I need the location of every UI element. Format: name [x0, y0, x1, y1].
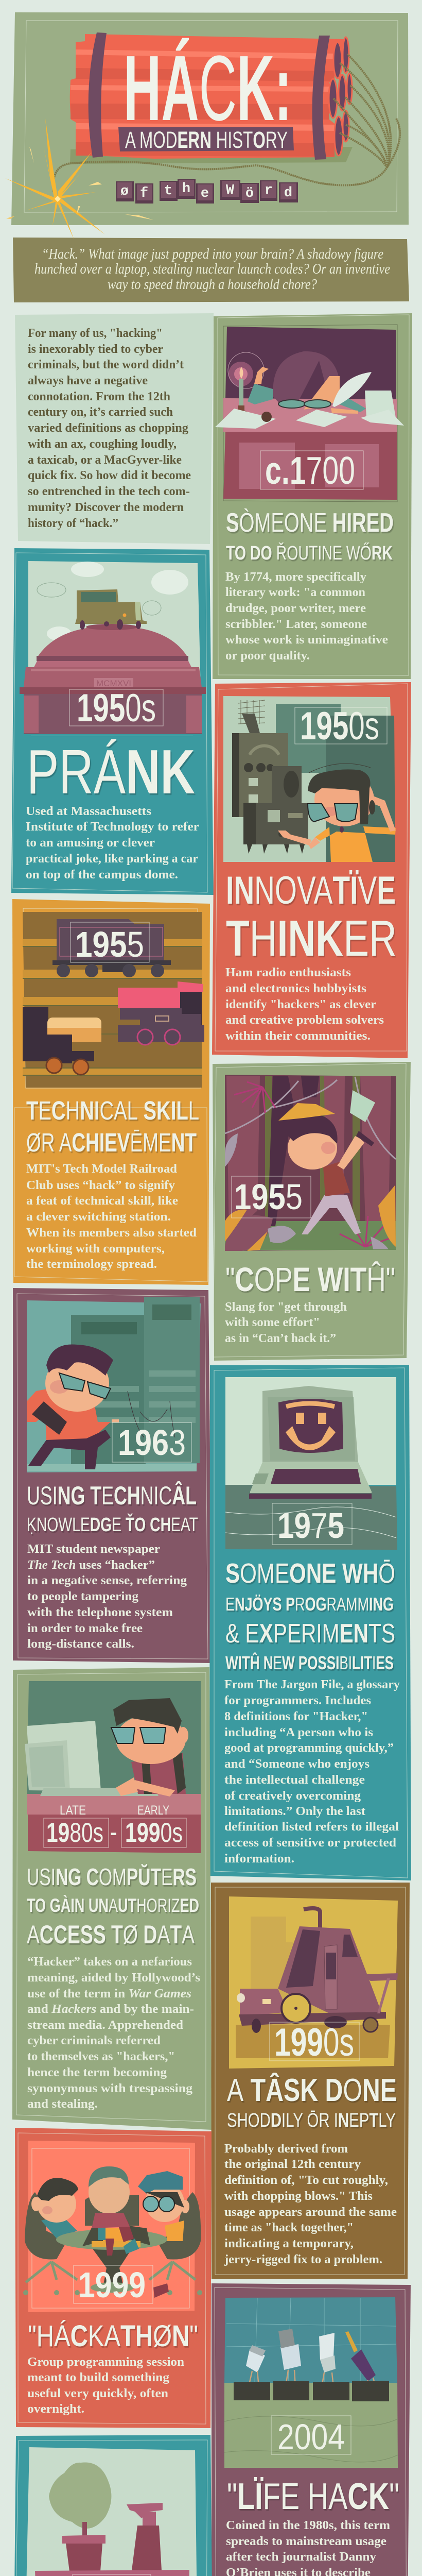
date: 1990s: 1990s: [274, 2021, 354, 2064]
heading: someone hired: [226, 508, 394, 564]
panel: 1999 hackathon: [15, 2128, 212, 2428]
date: c.1700: c.1700: [265, 449, 355, 492]
text: description: with some effort": [225, 1316, 320, 1329]
panel: 1955 cope with: [213, 1062, 411, 1361]
heading: using computers to gain unauthorized access: [27, 1863, 199, 1949]
date: 1963: 1963: [118, 1422, 186, 1463]
icon: ethernet plug: [319, 2333, 336, 2372]
text: description: 8 definitions for "Hacker,": [224, 1710, 368, 1723]
text: description: and stealing.: [27, 2097, 98, 2111]
heading: cope with: "COPE WITĤ": [225, 1260, 395, 1298]
illustration: jerry-rigged car: [229, 1896, 398, 2069]
text: description: use of the term in War Games: [27, 1987, 191, 2001]
icon: monitor: [249, 1386, 372, 1499]
heading: using computers to gain unauthorized access: ACCESS TØ DATA: [27, 1920, 195, 1949]
text: description: overnight.: [27, 2402, 84, 2416]
heading: someone hired: SÒMEONE HIRED: [226, 508, 394, 538]
keyboard tiles: of the Word: W: [226, 183, 235, 198]
text: description: drudge, poor writer, mere: [225, 602, 366, 615]
keyboard tiles: of the Word: ø: [120, 184, 129, 199]
text: description: [27, 1955, 200, 2111]
text: description: Group programming session: [27, 2355, 184, 2369]
date: 1999: 1999: [78, 2265, 146, 2305]
panel: intro paragraph: varied definitions as chopping: [28, 421, 188, 435]
heading: using technical knowledge to cheat: ḲNOWLEDGE ŤO CHEAT: [27, 1513, 198, 1536]
panel: intro paragraph: connotation. From the 12th: [28, 390, 170, 403]
text: description: information.: [224, 1852, 294, 1866]
text: description: [225, 966, 384, 1043]
heading: innovative thinker: [226, 869, 397, 967]
text: description: and electronics hobbyists: [225, 982, 366, 995]
text: description: to themselves as "hackers,": [27, 2050, 175, 2063]
keyboard tiles: of the Word: h: [182, 181, 190, 197]
date: late 1980s to early 1990s: LATE: [60, 1803, 86, 1818]
text: description: meaning, aided by Hollywood’s: [27, 1971, 200, 1985]
text: description: of creatively overcoming: [224, 1789, 361, 1803]
keyboard tiles: of the Word: [116, 179, 298, 204]
panel: intro paragraph: always have a negative: [28, 374, 148, 387]
heading: a task done shoddily: [227, 2073, 397, 2131]
heading: someone who enjoys programming: [225, 1558, 395, 1673]
text: description: to an amusing or clever: [26, 836, 155, 850]
text: description: [27, 1543, 187, 1651]
figure: lumberjack: [275, 1090, 375, 1234]
panel: intro paragraph: history of “hack.”: [28, 517, 118, 530]
text: description: including “A person who is: [224, 1726, 373, 1739]
date: late 1980s to early 1990s: -: [110, 1821, 117, 1844]
text: description: MIT student newspaper: [27, 1543, 160, 1556]
heading: someone who enjoys programming: WITĤ NEW POSSIBILITIES: [225, 1652, 394, 1673]
text: description: identify "hackers" as clever: [225, 998, 376, 1011]
panel: intro paragraph: criminals, but the word didn’t: [28, 358, 184, 371]
icon: tanker engine: [23, 1007, 101, 1075]
text: description: after tech journalist Danny: [226, 2550, 376, 2564]
text: description: long-distance calls.: [27, 1637, 134, 1651]
panel: hero dynamite title: [11, 12, 409, 225]
figure: operator: [278, 764, 396, 862]
heading: innovative thinker: THINKER: [226, 910, 397, 967]
text: description: the intellectual challenge: [224, 1773, 365, 1787]
text: description: Slang for "get through: [225, 1300, 347, 1314]
keyboard tiles: of the Word: d: [284, 185, 292, 201]
icon: rope fuse: [53, 54, 400, 192]
illustration: ham radio operator: [223, 696, 396, 862]
heading: someone hired: TO DO ŘOUTINE WŐRK: [226, 542, 393, 564]
heading: a task done shoddily: A TÂSK DONE: [227, 2073, 397, 2108]
panel: 1963 using technical knowledge: [13, 1288, 212, 1663]
date: 2004: 2004: [277, 2417, 345, 2457]
text: description: MIT's Tech Model Railroad: [26, 1162, 178, 1176]
text: description: and “Someone who enjoys: [224, 1757, 370, 1771]
text: description: and creative problem solvers: [225, 1013, 384, 1027]
heading: life hack: "LÏFE HACK": [227, 2476, 399, 2517]
figure: programmer right: [138, 2171, 189, 2222]
text: description: [26, 805, 199, 882]
panel: intro paragraph: For many of us, "hacking": [28, 327, 163, 340]
text: description: working with computers,: [26, 1242, 165, 1256]
panel: intro paragraph: is inexorably tied to cyber: [28, 343, 163, 356]
text: description: Ham radio enthusiasts: [225, 966, 351, 979]
illustration: cables in binder clips: [224, 2297, 398, 2468]
text: description: with the telephone system: [27, 1606, 173, 1619]
text: description: Club uses “hack” to signify: [26, 1179, 175, 1192]
heading: innovative thinker: INNOVATÏVE: [226, 869, 396, 912]
subtitle band: A MODERN HISTORY: [125, 127, 288, 153]
text: description: Probably derived from: [224, 2142, 348, 2156]
figure: hacker: [111, 1698, 188, 1797]
heading: someone who enjoys programming: SOMEONE WHŌ: [225, 1558, 395, 1589]
heading: using computers to gain unauthorized access: USING COMPŬTERS: [27, 1863, 197, 1890]
illustration: plant and spray bottle: [26, 2447, 197, 2576]
date: 1950s: 1950s: [77, 686, 156, 730]
text: description: meant to build something: [27, 2371, 169, 2384]
text: description: or poor quality.: [225, 649, 310, 663]
panel: 1950s prank: [11, 548, 214, 895]
heading: using technical knowledge to cheat: USING TECHNICÂL: [27, 1481, 197, 1510]
illustration: smiley computer: [225, 1377, 397, 1550]
text: description: [224, 2142, 397, 2266]
figure: programmer center: [89, 2166, 130, 2228]
text: description: stream media. Apprehended: [27, 2019, 184, 2032]
date: late 1980s to early 1990s: EARLY: [137, 1803, 169, 1818]
icon: audio jack: [345, 2331, 376, 2381]
text: description: useful very quickly, often: [27, 2387, 168, 2400]
panel: 1990s a task done shoddily: [211, 1883, 410, 2279]
text: description: [225, 570, 388, 663]
keyboard tiles: of the Word: t: [164, 183, 172, 199]
panel: intro paragraph: so entrenched in the tech com-: [28, 485, 190, 498]
text: description: whose work is unimaginative: [225, 633, 388, 647]
panel: intro question banner: way to speed through a household chore?: [108, 277, 317, 293]
text: description: in order to make free: [27, 1622, 143, 1635]
heading: technical skill: ØR ACHIEVĒMENT: [26, 1128, 197, 1157]
text: description: [225, 1300, 347, 1345]
icon: car: [237, 1908, 398, 2033]
text: description: hence the term becoming: [27, 2066, 167, 2079]
panel: intro paragraph: quick fix. So how did it become: [28, 469, 191, 482]
text: description: literary work: "a common: [225, 586, 365, 599]
heading: someone who enjoys programming: & EXPERIMENTS: [225, 1619, 395, 1649]
keyboard tiles: of the Word: e: [201, 186, 209, 201]
text: description: practical joke, like parking a car: [26, 852, 198, 866]
panel: intro paragraph: munity? Discover the modern: [28, 501, 184, 514]
illustration: model railroad: [23, 912, 204, 1088]
text: description: [26, 1162, 197, 1271]
text: description: a clever switching station.: [26, 1210, 171, 1224]
heading: technical skill: [26, 1096, 199, 1157]
text: description: jerry-rigged fix to a problem.: [224, 2253, 382, 2266]
keyboard tiles: of the Word: ö: [245, 186, 254, 201]
text: description: with chopping blows." This: [224, 2190, 373, 2203]
text: description: definition listed refers to illegal: [224, 1820, 399, 1834]
text: description: spreads to mainstream usage: [226, 2535, 386, 2548]
text: description: in a negative sense, referring: [27, 1574, 187, 1587]
keyboard tiles: of the Word: f: [140, 186, 148, 201]
heading: using computers to gain unauthorized access: TO GÀIN UNAUTHORIZED: [27, 1895, 199, 1916]
date: 1950s: 1950s: [300, 704, 379, 748]
panel: 2004 life hack: [212, 2283, 411, 2576]
date: late 1980s to early 1990s: [44, 1803, 186, 1848]
illustration: scribe asleep at desk: [215, 325, 404, 502]
text: description: within their communities.: [225, 1029, 371, 1043]
heading: technical skill: TECHNICAL SKILL: [26, 1096, 199, 1125]
date: 1955: 1955: [234, 1177, 303, 1217]
text: description: the terminology spread.: [26, 1258, 157, 1271]
icon: truck: [75, 589, 147, 630]
icon: crt monitor: [25, 1721, 159, 1796]
illustration: three programmers at table: [23, 2141, 202, 2312]
main title: HÁCK:: [124, 37, 292, 140]
text: description: Institute of Technology to refer: [26, 820, 199, 834]
text: description: synonymous with trespassing: [27, 2082, 192, 2095]
text: description: Used at Massachusetts: [26, 805, 151, 818]
panel: 1975 someone who enjoys programming: [209, 1365, 411, 1880]
text: description: indicating a temporary,: [224, 2237, 354, 2250]
illustration: dynamite bundle: [70, 32, 353, 164]
panel: 1950s innovative thinker: [212, 682, 411, 1058]
keyboard tiles: of the Word: r: [265, 183, 273, 198]
text: description: The Tech uses “hacker”: [27, 1558, 155, 1572]
figure: phreaker: [27, 1345, 119, 1469]
text: description: and Hackers and by the main-: [27, 2003, 194, 2016]
text: description: as in “Can’t hack it.”: [225, 1332, 336, 1345]
illustration: lumberjack in forest: [225, 1075, 396, 1251]
panel: intro paragraph: century on, it’s carried such: [28, 405, 173, 419]
panel: late 1980s early 1990s unauthorized access: [12, 1667, 212, 2130]
date: 1975: 1975: [277, 1505, 344, 1546]
text: description: cyber criminals referred: [27, 2034, 161, 2047]
icon: coal car: [52, 919, 171, 977]
text: description: “Hacker” takes on a nefarious: [27, 1955, 192, 1969]
heading: someone who enjoys programming: ENJÖYS PROGRAMMING: [225, 1594, 394, 1615]
text: description: [226, 2519, 390, 2576]
text: description: usage appears around the same: [224, 2206, 397, 2219]
heading: using technical knowledge to cheat: [27, 1481, 198, 1536]
text: description: [27, 2355, 184, 2416]
text: description: to people tampering: [27, 1590, 138, 1603]
text: description: good at programming quickly,”: [224, 1741, 394, 1755]
heading: prank: PRÁNK: [27, 737, 195, 807]
text: description: limitations.” Only the last: [224, 1805, 365, 1818]
text: description: When its members also started: [26, 1226, 197, 1240]
text: description: access of sensitive or protected: [224, 1836, 397, 1850]
panel: intro paragraph: with an ax, coughing loudly,: [28, 437, 177, 451]
heading: hackathon: "HÁCKATHØN": [28, 2319, 198, 2353]
date: late 1980s to early 1990s: 1980s: [46, 1818, 103, 1848]
icon: pink locomotive: [118, 981, 204, 1045]
figure: programmer left: [31, 2178, 78, 2223]
date: late 1980s to early 1990s: 1990s: [125, 1818, 183, 1848]
panel: 1955 technical skill: [12, 899, 210, 1285]
panel: intro paragraph: a taxicab, or a MacGyver-like: [28, 453, 182, 467]
text: description: By 1774, more specifically: [225, 570, 366, 584]
text: description: [224, 1678, 400, 1866]
illustration: hacker at computer: [25, 1681, 201, 1853]
text: description: the original 12th century: [224, 2158, 361, 2171]
panel: intro question banner: [13, 238, 409, 302]
icon: usb plug: [246, 2345, 266, 2372]
text: description: Coined in the 1980s, this term: [226, 2519, 390, 2532]
icon: spark burst: [5, 118, 153, 240]
text: description: definition of, "To cut roughly,: [224, 2174, 388, 2187]
panel: c.1700 someone hired: [213, 313, 412, 679]
text: description: time as "hack together,": [224, 2221, 354, 2234]
panel: intro paragraph: [15, 313, 214, 544]
illustration: truck on campus dome: MCMXVI: [96, 679, 131, 688]
heading: a task done shoddily: SHODDILY ŌR INEPTLY: [227, 2110, 396, 2131]
date: 1955: 1955: [75, 924, 144, 964]
text: description: a feat of technical skill, like: [26, 1194, 178, 1208]
illustration: phone phreaker: [27, 1297, 201, 1472]
text: description: scribbler." Later, someone: [225, 618, 367, 631]
panel: 2010 growth hacker: [13, 2435, 214, 2576]
illustration: truck on campus dome: [20, 561, 206, 736]
icon: usb plug 2: [278, 2329, 301, 2370]
text: description: From The Jargon File, a glossary: [224, 1678, 400, 1691]
text: description: on top of the campus dome.: [26, 868, 178, 882]
text: description: for programmers. Includes: [224, 1694, 371, 1707]
